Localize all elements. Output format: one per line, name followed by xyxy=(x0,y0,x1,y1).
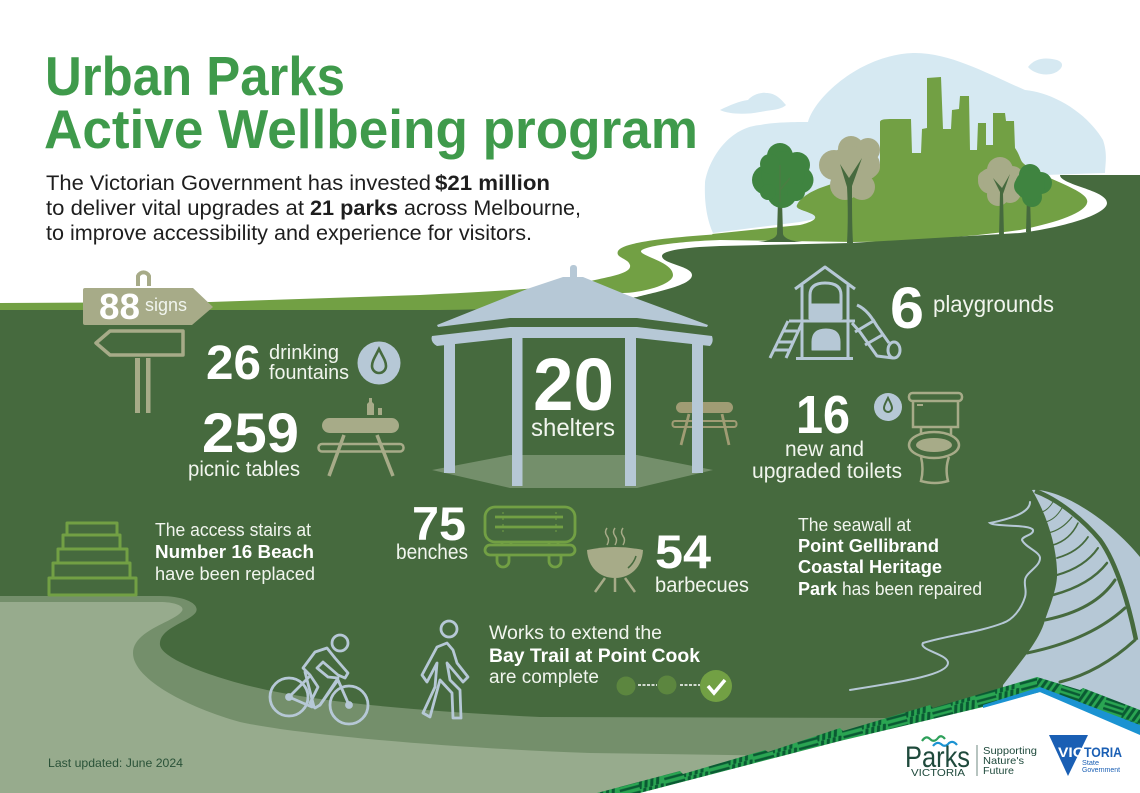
park path green band xyxy=(0,234,720,312)
seawall text: Point Gellibrand xyxy=(798,535,939,556)
icon: playground xyxy=(770,267,900,358)
playgrounds stat: 6 xyxy=(890,276,924,341)
stairs feature xyxy=(49,519,315,595)
barbecues stat: barbecues xyxy=(655,574,749,597)
shelters stat: shelters xyxy=(531,414,615,442)
city skyline and hill xyxy=(712,77,1087,242)
Bay Trail feature: are complete xyxy=(489,667,599,688)
sky cloud backdrop xyxy=(705,53,1106,233)
signs stat: signs xyxy=(145,295,187,315)
intro text: The Victorian Government has invested xyxy=(46,171,431,195)
logo: Parks Victoria: VICTORIA xyxy=(911,767,965,779)
toilets stat: new and xyxy=(785,438,864,461)
icon: walker xyxy=(422,621,468,718)
signs stat xyxy=(83,272,213,413)
last updated note: Last updated: June 2024 xyxy=(48,756,183,770)
picnic tables stat xyxy=(188,398,404,481)
intro text xyxy=(46,171,581,245)
intro text: 21 parks xyxy=(310,196,398,220)
seawall illustration xyxy=(850,490,1140,745)
progress checkmark xyxy=(616,670,732,702)
trees xyxy=(752,136,1052,243)
logo: Parks Victoria: Nature's xyxy=(983,755,1024,767)
icon: stairs xyxy=(49,523,136,595)
toilets stat: 16 xyxy=(796,385,850,445)
playgrounds stat xyxy=(770,267,1054,358)
toilets stat: upgraded toilets xyxy=(752,460,902,483)
tree: tan right xyxy=(978,157,1024,237)
icon: signpost xyxy=(83,272,213,413)
barbecues stat xyxy=(587,525,749,597)
benches stat: 75 xyxy=(412,497,466,550)
seawall text: The seawall at xyxy=(798,514,911,535)
title xyxy=(44,45,698,160)
logo: Parks Victoria: Supporting xyxy=(983,745,1037,757)
seawall text: Coastal Heritage xyxy=(798,556,942,577)
benches stat xyxy=(396,497,575,567)
logo: Victoria State Government: VIC xyxy=(1058,744,1084,760)
icon: barbecue xyxy=(587,528,643,592)
intro text: to deliver vital upgrades at xyxy=(46,196,304,220)
dark green parkland xyxy=(0,175,1140,793)
icon: toilet xyxy=(909,393,962,483)
shelters stat: 20 xyxy=(533,343,614,426)
intro text: $21 million xyxy=(435,171,550,195)
tree: tan left xyxy=(819,136,880,243)
signs stat: 88 xyxy=(99,286,140,327)
logo: Victoria State Government xyxy=(1049,735,1122,776)
icon: cyclist xyxy=(270,635,368,724)
title: Active Wellbeing program xyxy=(44,98,698,160)
icon: picnic table xyxy=(318,398,404,476)
picnic tables stat: 259 xyxy=(202,401,299,464)
logo: Parks Victoria: Parks xyxy=(905,741,970,774)
benches stat: benches xyxy=(396,541,468,564)
stairs feature: The access stairs at xyxy=(155,519,311,540)
barbecues stat: 54 xyxy=(655,525,711,578)
drinking fountains stat: 26 xyxy=(206,337,261,390)
drinking fountains stat xyxy=(206,337,400,390)
icon: bench xyxy=(485,507,575,567)
logo: Parks Victoria: Future xyxy=(983,765,1014,777)
shelter gazebo xyxy=(432,265,713,488)
tree: dark green left xyxy=(752,143,814,242)
seawall text: Park xyxy=(798,578,838,599)
Bay Trail feature xyxy=(489,623,732,702)
title: Urban Parks xyxy=(45,45,345,107)
stairs feature: Number 16 Beach xyxy=(155,541,314,562)
playgrounds stat: playgrounds xyxy=(933,291,1054,317)
picnic table inside shelter xyxy=(672,402,736,445)
logo: Parks Victoria xyxy=(905,736,1037,779)
toilets stat xyxy=(752,385,962,483)
stairs feature: have been replaced xyxy=(155,563,315,584)
tree: dark green right xyxy=(1014,164,1052,232)
logo: Victoria State Government: Government xyxy=(1082,767,1120,774)
drinking fountains stat: fountains xyxy=(269,362,349,384)
lower path layers xyxy=(0,596,885,793)
icon: small water drop xyxy=(874,393,902,421)
logo: Victoria State Government: State xyxy=(1082,760,1099,767)
Bay Trail feature: Works to extend the xyxy=(489,623,662,644)
intro text: to improve accessibility and experience for visitors. xyxy=(46,221,532,245)
picnic tables stat: picnic tables xyxy=(188,458,300,481)
icon: water drop xyxy=(358,342,400,384)
seawall text xyxy=(798,514,982,599)
intro text: across Melbourne, xyxy=(404,196,581,220)
drinking fountains stat: drinking xyxy=(269,342,339,364)
Bay Trail feature: Bay Trail at Point Cook xyxy=(489,646,700,667)
patterned bottom border xyxy=(597,677,1140,793)
seawall text: has been repaired xyxy=(842,578,982,599)
shoreline path xyxy=(850,502,1040,690)
logo: Victoria State Government: TORIA xyxy=(1084,744,1122,760)
